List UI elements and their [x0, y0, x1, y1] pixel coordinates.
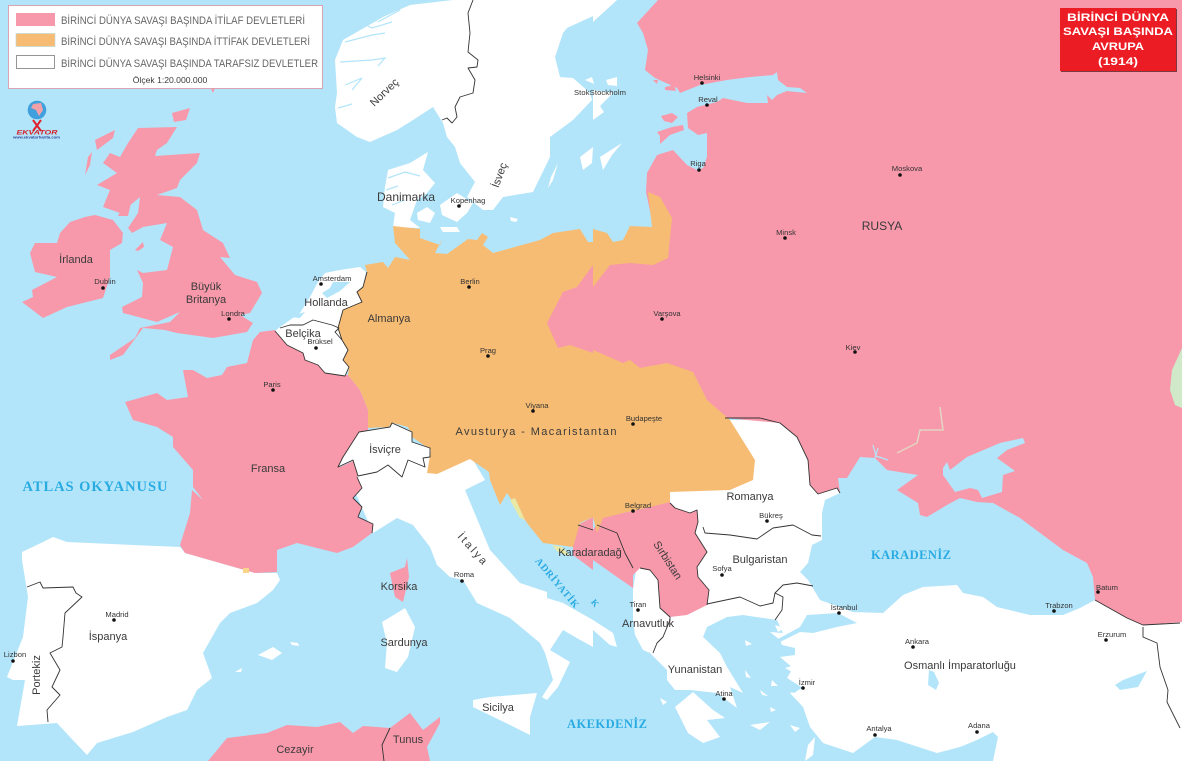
country labels: İrlanda — [59, 253, 94, 266]
France — [125, 330, 373, 573]
country labels: İsviçre — [369, 443, 401, 456]
country labels: Hollanda — [304, 297, 349, 309]
country labels: Romanya — [726, 491, 774, 503]
Netherlands and Belgium borders — [275, 272, 367, 376]
Balearic islands — [235, 642, 299, 672]
country labels — [31, 76, 1016, 756]
Switzerland border — [338, 423, 430, 477]
Aegean islands — [660, 625, 815, 761]
country labels: RUSYA — [862, 219, 902, 233]
city labels and markers: Amsterdam — [313, 274, 351, 283]
Denmark — [383, 152, 473, 232]
Algeria and Tunisia — [208, 713, 440, 761]
legend swatch: Neutral — [16, 56, 54, 68]
city labels and markers: Prag — [480, 346, 496, 355]
Scottish islands — [85, 88, 215, 251]
title box: AVRUPA — [1092, 41, 1144, 53]
country labels: Arnavutluk — [622, 618, 674, 630]
Corner of Pyrenees (Andorra) — [243, 568, 249, 573]
icon: Ekvator logo — [12, 101, 60, 140]
Dalmatian islands — [510, 498, 570, 556]
city labels and markers: Kopenhag — [451, 196, 485, 205]
city labels and markers: Helsinki — [694, 73, 721, 82]
Iberia — [7, 537, 280, 755]
panel: Low Countries and Switzerland — [243, 267, 430, 573]
Small Izmir and Adriatic coastline detail — [785, 687, 803, 693]
Great Britain — [97, 127, 262, 360]
Serbia-Montenegro and Albania borders — [578, 525, 670, 653]
city labels and markers: Atina — [715, 689, 733, 698]
country labels: Avusturya - Macaristantan — [456, 426, 616, 438]
Netherlands and Belgium — [275, 267, 366, 376]
city labels and markers: Adana — [968, 721, 991, 730]
title box — [1060, 8, 1177, 72]
city labels and markers: Minsk — [776, 228, 796, 237]
legend label: Central Powers: BİRİNCİ DÜNYA SAVAŞI BAŞINDA İTTİFAK DEVLETLERİ — [61, 35, 310, 48]
Romania-Bulgaria border — [703, 525, 821, 539]
country labels: İsveç — [489, 160, 510, 189]
Dnieper estuary — [873, 445, 888, 460]
Norway-Sweden border — [442, 0, 478, 123]
Lake Van — [1115, 671, 1147, 690]
Swedish islands — [510, 143, 622, 222]
Peloponnese — [675, 692, 725, 743]
city labels and markers: İstanbul — [831, 603, 858, 612]
country labels: Sırbistan — [650, 539, 684, 582]
Dnieper river (pale green) — [897, 407, 943, 453]
Ural side neighbour (pale green) — [1170, 348, 1182, 408]
Greece-Turkey border — [775, 593, 783, 620]
city labels and markers: Riga — [690, 159, 707, 168]
country labels: Belçika — [285, 328, 322, 340]
Estonian islands — [657, 113, 684, 144]
country labels: Cezayir — [276, 744, 314, 756]
icon: Ekvator logo: EKVATOR — [16, 130, 58, 136]
city labels and markers: Varşova — [653, 309, 681, 318]
city labels and markers: Batum — [1096, 583, 1118, 592]
Russia — [545, 0, 1182, 625]
legend swatch: Central Powers — [16, 34, 55, 46]
legend label: Neutral: BİRİNCİ DÜNYA SAVAŞI BAŞINDA TARAFSIZ DEVLETLER — [61, 57, 318, 70]
city labels and markers: Bükreş — [759, 511, 783, 520]
Sea of Azov — [943, 438, 1025, 498]
city labels and markers: Berlin — [460, 277, 480, 286]
city labels and markers: Viyana — [525, 401, 549, 410]
title box: BİRİNCİ DÜNYA — [1067, 11, 1169, 24]
country labels: Yunanistan — [668, 664, 722, 676]
sea labels: ATLAS OKYANUSU — [22, 479, 168, 495]
country labels: İspanya — [89, 630, 128, 643]
country labels: Tunus — [393, 734, 424, 746]
Switzerland — [338, 423, 430, 477]
panel: inland and enclosed seas — [510, 438, 1147, 693]
sea labels — [22, 479, 951, 731]
legend label: Entente: BİRİNCİ DÜNYA SAVAŞI BAŞINDA İTİLAF DEVLETLERİ — [61, 14, 305, 27]
Scandinavia — [335, 0, 617, 210]
city labels and markers: StokStockholm — [574, 88, 626, 97]
city labels and markers: Roma — [454, 570, 475, 579]
country labels: Danimarka — [377, 190, 435, 204]
sea labels: ADRİYATİK — [532, 555, 582, 611]
country labels: Osmanlı İmparatorluğu — [904, 659, 1016, 672]
country labels: Fransa — [251, 463, 286, 475]
sea labels: KARADENİZ — [871, 548, 951, 562]
city labels and markers: Moskova — [892, 164, 923, 173]
city labels and markers: Brüksel — [307, 337, 333, 346]
Sardinia — [382, 608, 415, 672]
city labels and markers: Lizbon — [4, 650, 26, 659]
city labels and markers: Paris — [263, 380, 281, 389]
Italy — [350, 445, 617, 700]
country labels: İtalya — [455, 530, 491, 568]
Corsica — [390, 558, 409, 602]
country labels: Britanya — [186, 294, 227, 306]
Lake Tuz — [928, 670, 939, 690]
France-Italy border — [353, 477, 373, 533]
city labels and markers: Budapeşte — [626, 414, 662, 423]
Balkans and Ottoman Empire — [633, 420, 1182, 761]
country labels: Korsika — [381, 581, 418, 593]
Norwegian fjords — [338, 10, 400, 108]
Bulgaria south border — [707, 583, 813, 606]
city labels and markers: Kiev — [846, 343, 861, 352]
Danish inlets — [386, 172, 420, 205]
title box: (1914) — [1098, 56, 1138, 68]
country labels: Sicilya — [482, 702, 515, 714]
Sea of Marmara — [778, 613, 857, 642]
Ireland — [22, 215, 123, 318]
country labels: Büyük — [191, 281, 222, 293]
legend box — [8, 6, 322, 88]
icon: Ekvator logo: www.ekvatorharita.com — [12, 136, 60, 140]
sea labels: K — [589, 597, 601, 609]
Sicily — [473, 693, 537, 735]
city labels and markers: Ankara — [905, 637, 930, 646]
city labels and markers: Trabzon — [1045, 601, 1073, 610]
title box: SAVAŞI BAŞINDA — [1063, 26, 1173, 38]
Portugal-Spain border — [27, 582, 82, 722]
city labels and markers: İzmir — [799, 678, 816, 687]
city labels and markers: Londra — [221, 309, 246, 318]
country labels: Almanya — [368, 313, 411, 325]
city labels and markers: Reval — [698, 95, 718, 104]
scale: Ölçek 1:20.000.000 — [133, 75, 207, 85]
Zuiderzee — [288, 282, 350, 318]
city labels and markers: Erzurum — [1098, 630, 1126, 639]
Finnish islands — [653, 80, 676, 91]
legend swatch: Entente — [16, 13, 55, 26]
Black Sea — [800, 457, 1095, 615]
panel: Central Powers (orange) — [338, 192, 755, 547]
country labels: Portekiz — [31, 655, 43, 695]
country labels: Bulgaristan — [732, 554, 788, 566]
country labels: Sardunya — [380, 637, 428, 649]
Algeria-Tunisia border — [382, 728, 390, 761]
sea labels: AKEKDENİZ — [567, 717, 647, 731]
Caucasus and Persia border — [1095, 600, 1180, 728]
country labels: Karadaradağ — [558, 547, 622, 559]
country labels: Norveç — [368, 76, 402, 109]
city labels and markers: Antalya — [866, 724, 892, 733]
Romania-Serbia border — [670, 503, 709, 605]
city labels and markers: Tiran — [629, 600, 647, 609]
city labels and markers: Belgrad — [625, 501, 651, 510]
city labels and markers: Dublin — [94, 277, 116, 286]
Romania-Austria and Romania-Russia border — [725, 418, 840, 494]
city labels and markers: Sofya — [712, 564, 732, 573]
city labels and markers: Madrid — [105, 610, 129, 619]
Serbia and Montenegro — [573, 492, 709, 617]
Stockholm archipelago — [585, 77, 617, 120]
